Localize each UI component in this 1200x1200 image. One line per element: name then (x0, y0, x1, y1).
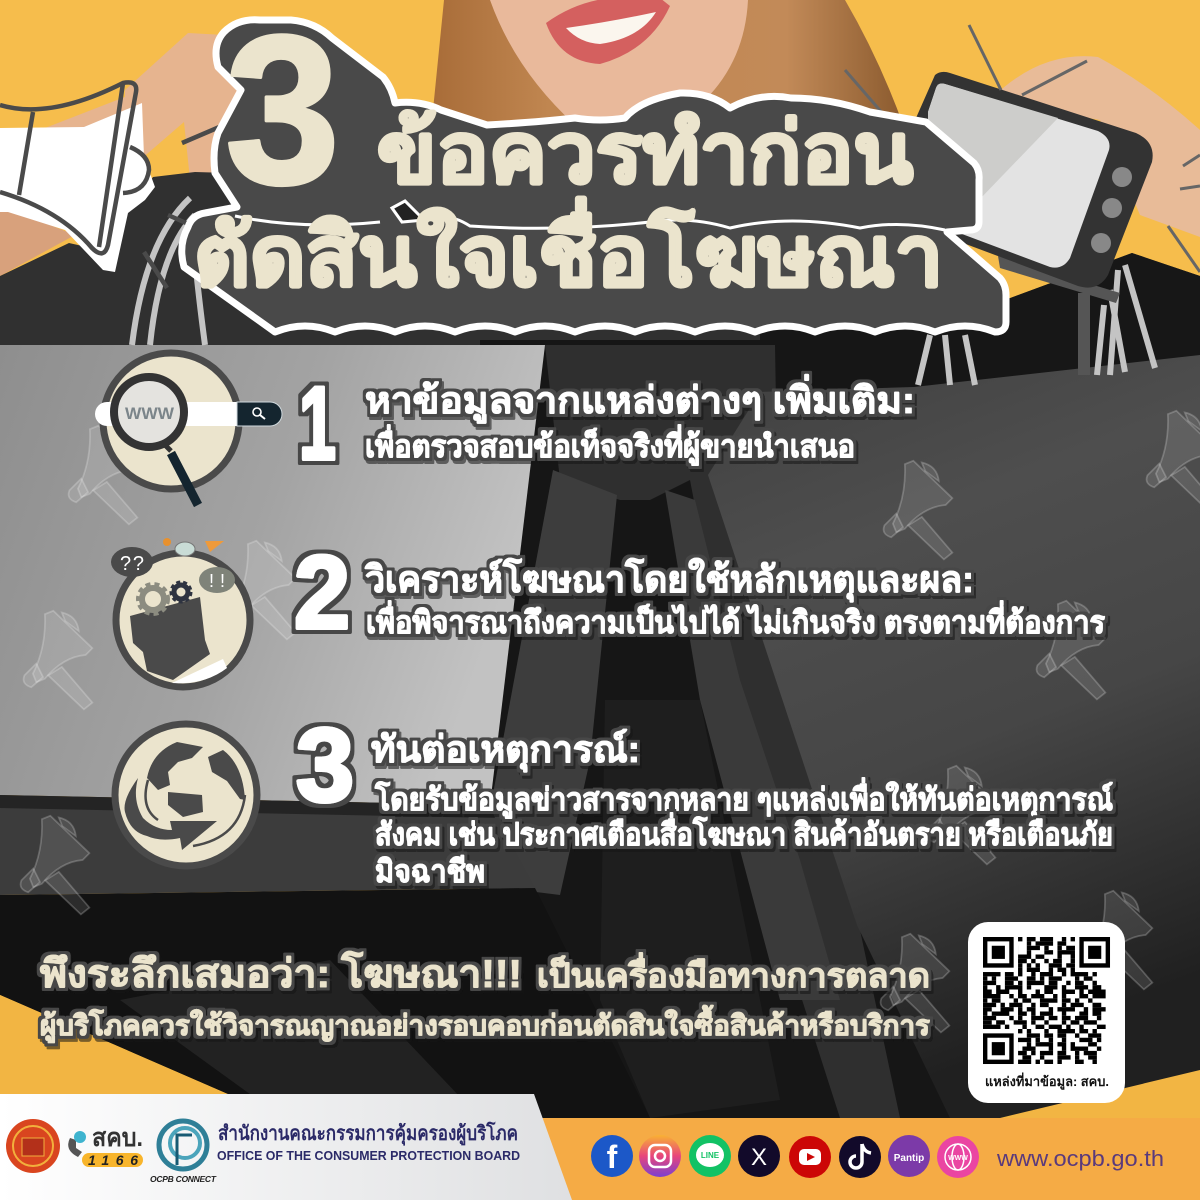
QR code (981, 935, 1112, 1066)
left bag (0, 345, 545, 805)
icon: www: WWW (948, 1155, 968, 1162)
website url: www.ocpb.go.th (996, 1146, 1164, 1171)
jacket (0, 130, 1200, 400)
item 3 heading: ทันต่อเหตุการณ์: (371, 729, 640, 773)
footer orange bar (540, 1118, 1200, 1200)
item 1 body: เพื่อตรวจสอบข้อเท็จจริงที่ผู้ขายนำเสนอ (365, 424, 855, 466)
title line 2: ตัดสินใจเชื่อโฆษณา (194, 197, 943, 303)
icon: search www (95, 353, 282, 505)
closing line 1a: พึงระลึกเสมอว่า: โฆษณา!!! (40, 951, 522, 996)
title divider wave (235, 216, 945, 230)
icon: head thinking (111, 538, 250, 687)
yellow lower left (0, 995, 283, 1118)
footer white panel (0, 1094, 572, 1200)
closing line 1b: เป็นเครื่องมือทางการตลาด (537, 952, 930, 994)
logo: seal (6, 1119, 60, 1173)
title line 1: ข้อควรทำก่อน (377, 106, 913, 200)
icon: head thinking: ?? (120, 553, 144, 575)
logo: hotline (68, 1124, 143, 1168)
bag handles (132, 198, 1155, 385)
icon: television (916, 72, 1153, 375)
centre dark area (480, 340, 1040, 1130)
icon: tv burst lines (825, 25, 1200, 272)
icon: line (689, 1135, 731, 1177)
watermark megaphones (21, 411, 1200, 1032)
logo: OCPB connect (150, 1121, 217, 1184)
closing line 2: ผู้บริโภคควรใช้วิจารณญาณอย่างรอบคอบก่อนตัดสินใจซื้อสินค้าหรือบริการ (40, 1004, 930, 1043)
item 1 number: 1 (299, 366, 336, 482)
icon: pantip (888, 1135, 930, 1177)
left arm (125, 33, 250, 228)
item 3 body line 1: โดยรับข้อมูลข่าวสารจากหลาย ๆแหล่งเพื่อให้ทันต่อเหตุการณ์ (374, 777, 1113, 819)
lips (546, 0, 670, 64)
icon: line: LINE (701, 1151, 720, 1160)
icon: X (738, 1135, 780, 1177)
icon: globe with arrow (115, 724, 257, 866)
title plate (182, 0, 1006, 332)
icon: facebook (591, 1135, 633, 1177)
icon: X: X (751, 1144, 767, 1171)
item 1 heading: หาข้อมูลจากแหล่งต่างๆ เพิ่มเติม: (365, 374, 915, 424)
item 3 body line 2: สังคม เช่น ประกาศเตือนสื่อโฆษณา สินค้าอันตราย หรือเตือนภัย (375, 812, 1113, 852)
item 2 (294, 535, 1105, 651)
item 2 number: 2 (294, 535, 350, 651)
item 3 (296, 708, 1113, 889)
item 2 heading: วิเคราะห์โฆษณาโดยใช้หลักเหตุและผล: (364, 557, 974, 603)
right arm (990, 56, 1200, 237)
item 3 number: 3 (296, 708, 354, 824)
logo: hotline: สคบ. (92, 1124, 143, 1152)
QR source caption: แหล่งที่มาข้อมูล: สคบ. (985, 1072, 1109, 1090)
icon: instagram (639, 1135, 681, 1177)
hair (430, 0, 905, 190)
icon: youtube (789, 1136, 831, 1178)
logo: hotline: 1166 (88, 1152, 138, 1168)
QR code card (968, 922, 1125, 1103)
icon: facebook: f (607, 1139, 618, 1175)
icon: megaphone (0, 82, 224, 288)
social icons (591, 1135, 979, 1178)
closing message (40, 951, 930, 1043)
left bag bottom (0, 795, 535, 895)
item 3 body line 3: มิจฉาชีพ (375, 854, 485, 889)
organisation name Thai: สำนักงานคณะกรรมการคุ้มครองผู้บริโภค (218, 1121, 518, 1147)
face and neck (490, 0, 748, 180)
organisation name English: OFFICE OF THE CONSUMER PROTECTION BOARD (217, 1149, 520, 1163)
yellow lower right (1000, 1070, 1200, 1118)
lower black area (0, 888, 650, 1118)
icon: search www: WWW (125, 404, 175, 423)
item 1 (299, 366, 915, 482)
icon: www (937, 1136, 979, 1178)
right bag (708, 355, 1200, 1118)
icon: pantip: Pantip (894, 1153, 924, 1164)
icon: head thinking: !! (209, 571, 225, 591)
item 2 body: เพื่อพิจารณาถึงความเป็นไปได้ ไม่เกินจริง ตรงตามที่ต้องการ (366, 600, 1105, 640)
teeth (566, 12, 656, 44)
logo: OCPB connect: OCPB CONNECT (150, 1174, 217, 1184)
title notch (392, 201, 424, 222)
icon: tiktok (839, 1136, 881, 1178)
